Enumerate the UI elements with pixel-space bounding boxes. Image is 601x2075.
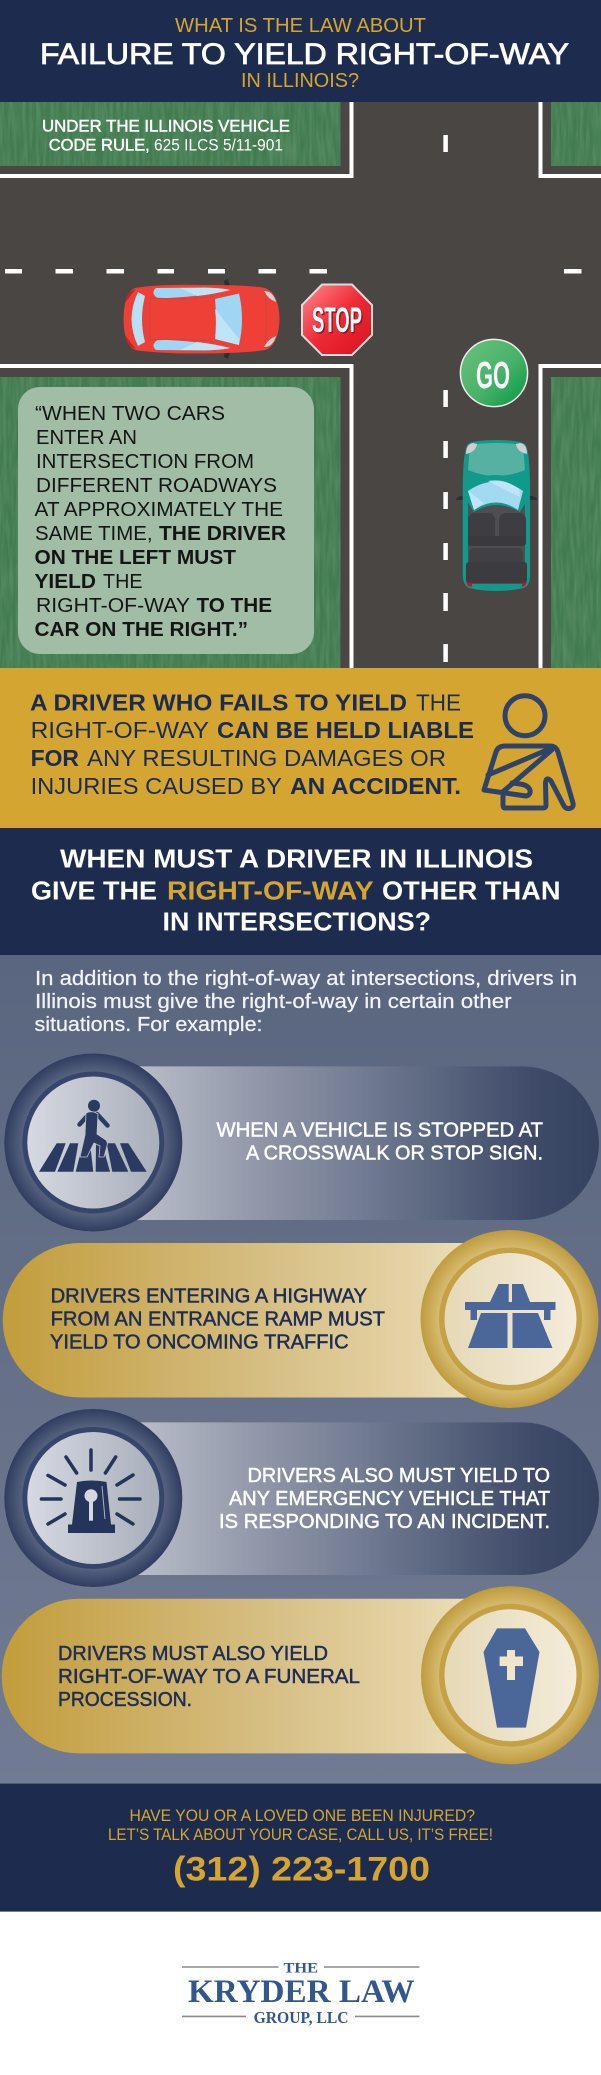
panel: road intersection scene xyxy=(0,102,601,668)
heading: title lines: WHAT IS THE LAW ABOUT xyxy=(175,15,426,37)
icon: stop sign: STOP xyxy=(312,301,362,340)
logo: Kryder Law Group: GROUP, LLC xyxy=(254,2008,349,2027)
icon: red car xyxy=(124,279,280,359)
icon: pedestrian crossing xyxy=(39,1100,147,1172)
quote text: ON THE LEFT MUST xyxy=(34,547,236,569)
crosswalk text: WHEN A VEHICLE IS STOPPED AT xyxy=(216,1120,543,1142)
heading text xyxy=(31,844,560,936)
crosswalk text xyxy=(216,1120,543,1164)
call to action text: HAVE YOU OR A LOVED ONE BEEN INJURED? xyxy=(130,1806,475,1825)
item: highway xyxy=(3,1230,599,1408)
highway text: FROM AN ENTRANCE RAMP MUST xyxy=(51,1308,385,1330)
item: funeral procession xyxy=(2,1586,599,1764)
liability text: A DRIVER WHO FAILS TO YIELD xyxy=(30,690,407,716)
liability text: CAN BE HELD LIABLE xyxy=(217,717,474,743)
quote text: “WHEN TWO CARS xyxy=(35,403,225,425)
text: vehicle code rule: 625 ILCS 5/11-901 xyxy=(154,136,283,155)
panel: liability band xyxy=(0,668,601,828)
icon: go sign xyxy=(460,339,528,407)
heading: title lines xyxy=(40,15,569,92)
callout: quote box xyxy=(18,387,314,654)
quote text: THE xyxy=(103,571,142,593)
funeral text xyxy=(58,1643,360,1711)
text: vehicle code rule: CODE RULE, xyxy=(49,136,150,155)
item: emergency vehicle xyxy=(4,1409,599,1587)
panel: call to action footer xyxy=(0,1784,601,1912)
liability text: AN ACCIDENT. xyxy=(290,773,461,799)
emergency text: ANY EMERGENCY VEHICLE THAT xyxy=(229,1488,550,1510)
crosswalk text: A CROSSWALK OR STOP SIGN. xyxy=(246,1142,543,1164)
quote text: RIGHT-OF-WAY xyxy=(36,595,190,617)
intro text: situations. For example: xyxy=(34,1014,262,1036)
heading text: RIGHT-OF-WAY xyxy=(167,876,374,906)
emergency text: IS RESPONDING TO AN INCIDENT. xyxy=(219,1511,550,1533)
liability text: RIGHT-OF-WAY xyxy=(31,717,209,743)
emergency text xyxy=(219,1465,550,1533)
highway text: YIELD TO ONCOMING TRAFFIC xyxy=(50,1331,349,1353)
item: crosswalk xyxy=(4,1054,599,1232)
icon: highway overpass xyxy=(465,1284,556,1348)
highway text xyxy=(50,1285,385,1353)
quote text xyxy=(34,403,287,641)
heading text: OTHER THAN xyxy=(382,876,560,906)
icon: coffin xyxy=(484,1628,540,1728)
logo: Kryder Law Group: THE xyxy=(284,1960,318,1976)
panel: title header xyxy=(0,0,601,102)
heading text: IN INTERSECTIONS? xyxy=(162,906,431,936)
funeral text: PROCESSION. xyxy=(58,1689,192,1711)
logo: Kryder Law Group: KRYDER LAW xyxy=(188,1974,414,2010)
text: vehicle code rule xyxy=(42,117,290,155)
intro text: Illinois must give the right-of-way in certain other xyxy=(35,991,512,1013)
grass corners xyxy=(0,102,601,668)
icon: go sign: GO xyxy=(476,355,510,397)
icon: stop sign: STOP xyxy=(314,302,364,342)
heading text: WHEN MUST A DRIVER IN ILLINOIS xyxy=(60,844,533,874)
panel: when must a driver heading xyxy=(0,828,601,955)
heading: title lines: FAILURE TO YIELD RIGHT-OF-WAY xyxy=(40,38,569,71)
call to action text xyxy=(108,1806,493,1844)
heading text: GIVE THE xyxy=(31,876,157,906)
call to action text: LET’S TALK ABOUT YOUR CASE, CALL US, IT’S FREE! xyxy=(108,1825,493,1844)
icon: siren xyxy=(41,1450,140,1533)
quote text: DIFFERENT ROADWAYS xyxy=(36,475,277,497)
highway text: DRIVERS ENTERING A HIGHWAY xyxy=(51,1285,367,1307)
icon: green car xyxy=(456,440,537,591)
logo: Kryder Law Group xyxy=(182,1960,420,2027)
quote text: YIELD xyxy=(34,571,96,593)
quote text: INTERSECTION FROM xyxy=(36,451,254,473)
liability text: THE xyxy=(416,690,461,716)
quote text: CAR ON THE RIGHT.” xyxy=(34,619,248,641)
quote text: TO THE xyxy=(196,595,272,617)
intro text xyxy=(34,968,577,1036)
text: vehicle code rule: UNDER THE ILLINOIS VEHICLE xyxy=(42,117,290,136)
funeral text: RIGHT-OF-WAY TO A FUNERAL xyxy=(58,1666,360,1688)
emergency text: DRIVERS ALSO MUST YIELD TO xyxy=(248,1465,550,1487)
liability text xyxy=(30,690,474,799)
phone number: (312) 223-1700 xyxy=(173,1851,430,1889)
quote text: AT APPROXIMATELY THE xyxy=(34,499,283,521)
panel: right-of-way situations xyxy=(0,955,601,1784)
quote text: SAME TIME, xyxy=(35,523,152,545)
quote text: ENTER AN xyxy=(36,427,137,449)
icon: stop sign xyxy=(302,284,372,355)
funeral text: DRIVERS MUST ALSO YIELD xyxy=(58,1643,328,1665)
icon: person in seatbelt xyxy=(484,696,573,809)
liability text: INJURIES CAUSED BY xyxy=(31,773,282,799)
liability text: ANY RESULTING DAMAGES OR xyxy=(87,745,446,771)
intro text: In addition to the right-of-way at intersections, drivers in xyxy=(35,968,577,990)
heading: title lines: IN ILLINOIS? xyxy=(241,70,359,92)
quote text: THE DRIVER xyxy=(159,523,287,545)
liability text: FOR xyxy=(31,745,79,771)
